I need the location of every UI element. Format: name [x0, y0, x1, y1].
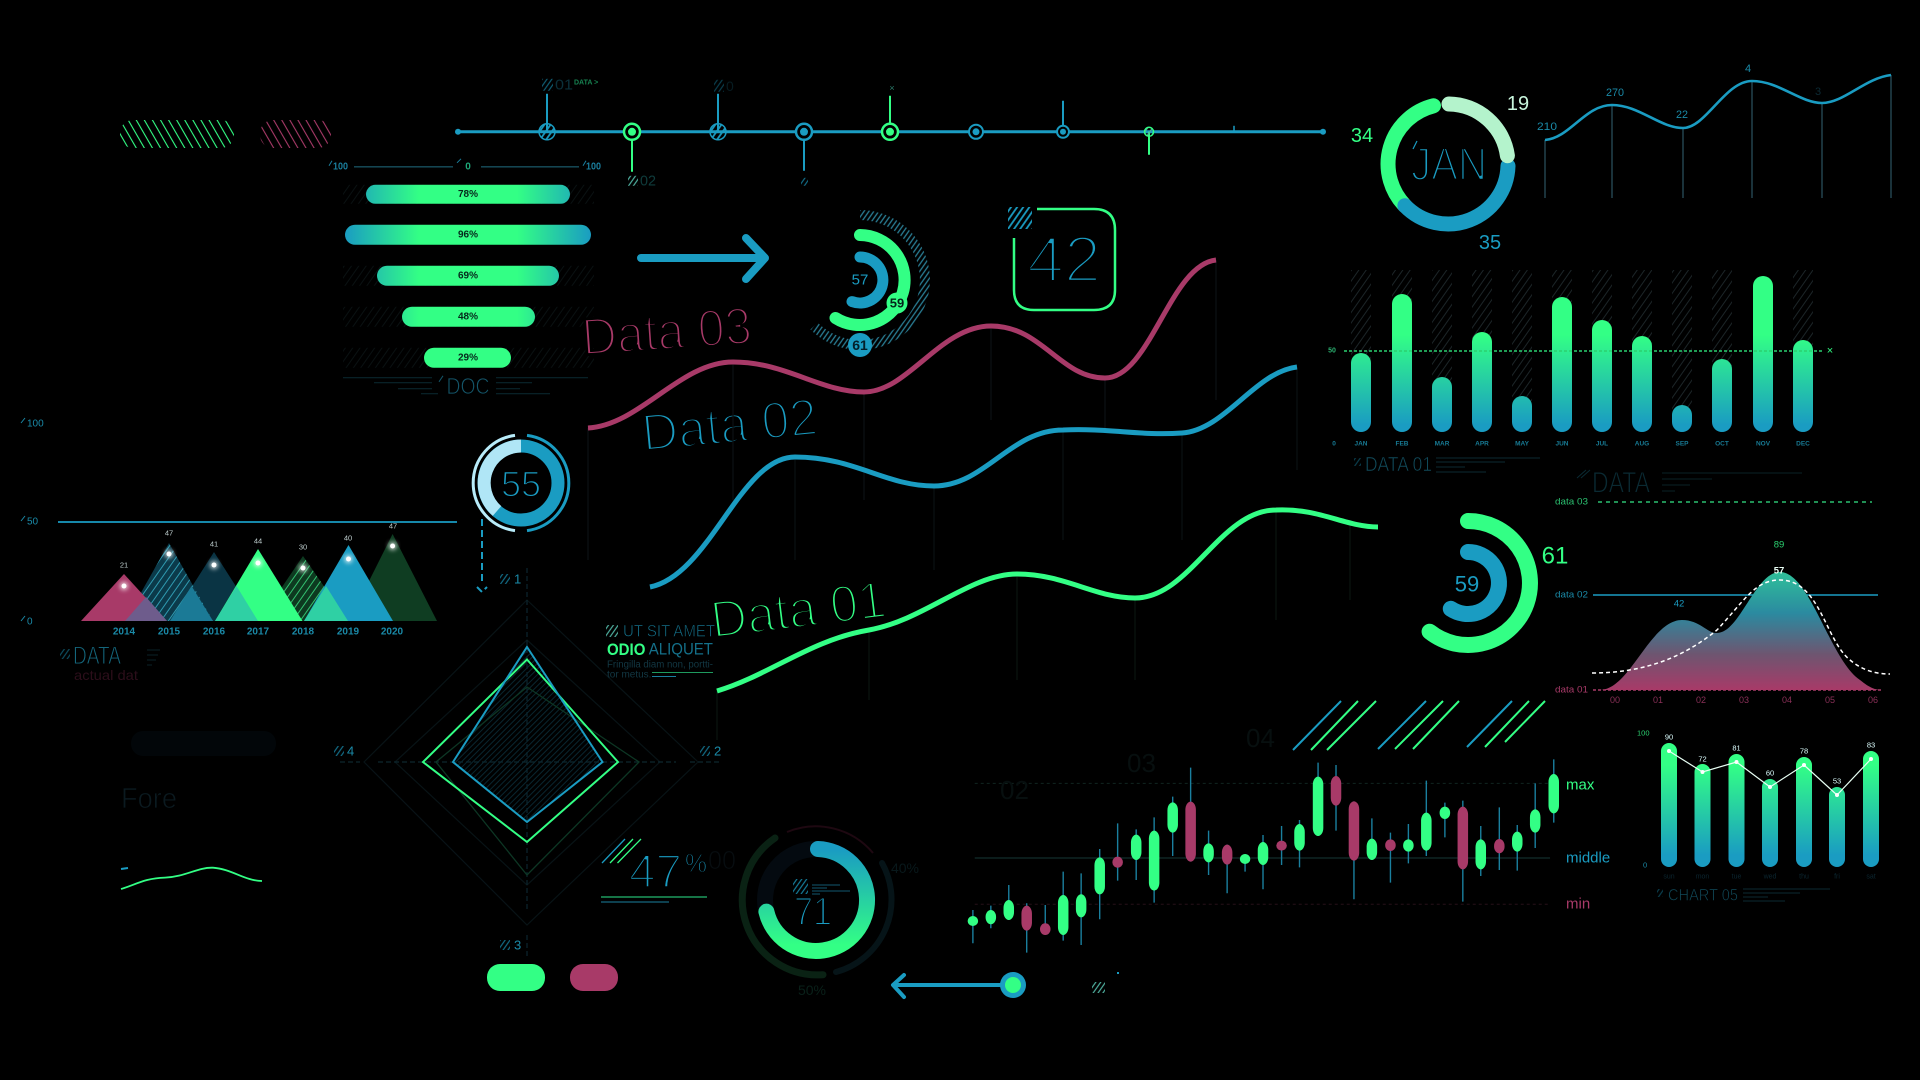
- funnel backdrop hatch: [343, 185, 594, 368]
- faded pill and Fore label: Fore: [121, 783, 177, 815]
- bar 96%: [345, 225, 591, 245]
- funnel axis: 100: [586, 161, 601, 172]
- x axis labels: [1610, 695, 1878, 705]
- DOC label: [343, 373, 588, 399]
- donut 59 and 61: 59: [1455, 572, 1479, 596]
- x axis labels: 00: [1610, 695, 1620, 705]
- x axis labels: 02: [1696, 695, 1706, 705]
- month labels: DEC: [1796, 440, 1810, 448]
- bar 78%: 78%: [458, 189, 478, 200]
- timeline labels: [542, 76, 895, 189]
- month labels: 0: [1332, 440, 1336, 448]
- value 61: 61: [1542, 542, 1568, 570]
- radar chart: [334, 568, 722, 957]
- data lines: data 02: [1555, 590, 1588, 600]
- chart 05 bars: [1637, 728, 1879, 904]
- timeline node 6: [969, 125, 983, 139]
- top right line chart: [1537, 63, 1891, 198]
- triangle chart: [21, 418, 457, 683]
- bar values: 83: [1867, 740, 1875, 750]
- donut 71: [742, 826, 919, 998]
- dim day labels: tue: [1732, 874, 1741, 880]
- triangles: [81, 534, 437, 621]
- year labels: 2016: [203, 626, 226, 638]
- green pill button: [487, 964, 545, 991]
- timeline labels: ×: [889, 83, 895, 93]
- bar values: 60: [1766, 768, 1774, 778]
- radar labels: 2: [714, 744, 721, 758]
- donut 59 and 61: [1430, 521, 1568, 645]
- timeline node 3: [710, 124, 726, 140]
- timeline node 2: [624, 124, 640, 140]
- dim day labels: sat: [1866, 874, 1876, 880]
- funnel axis: [329, 159, 601, 172]
- point values: 21: [120, 560, 128, 570]
- bar 69%: [377, 266, 559, 286]
- label Data 02: Data 02: [639, 388, 820, 463]
- timeline node 5: [882, 124, 898, 140]
- CHART 05 caption: CHART 05: [1668, 886, 1738, 904]
- month labels: NOV: [1756, 440, 1771, 448]
- number box 42: 42: [1027, 222, 1101, 296]
- dashed curve: [1592, 580, 1890, 674]
- radar hatch: [453, 647, 602, 822]
- area chart: [1555, 496, 1890, 705]
- DOC label: DOC: [446, 373, 490, 399]
- percent 47: 47: [629, 844, 682, 898]
- green series: [423, 660, 618, 842]
- green candles: [968, 774, 1559, 935]
- blue series: [453, 647, 602, 822]
- threshold line: [1344, 350, 1822, 352]
- text block UT SIT AMET: tor metus.: [607, 670, 651, 680]
- area values: 57: [1774, 566, 1784, 576]
- value 35: 35: [1479, 232, 1501, 254]
- area shape: [1600, 572, 1883, 690]
- area values: 89: [1774, 540, 1784, 550]
- data lines: data 01: [1555, 684, 1588, 696]
- faded DATA caption: [1577, 466, 1802, 500]
- white trend line: [1667, 749, 1873, 797]
- chart values: [1537, 63, 1821, 133]
- donut 71: 40%: [891, 860, 919, 876]
- chart values: 270: [1606, 87, 1624, 99]
- radar labels: 3: [514, 938, 521, 952]
- line Data 02: [650, 367, 1297, 587]
- DATA caption: [60, 642, 160, 683]
- month labels: SEP: [1675, 440, 1689, 448]
- axis labels: 100: [27, 418, 44, 430]
- radial gauge 57 59 61: 57: [852, 272, 868, 288]
- hatched pink pill: [260, 120, 331, 148]
- year labels: [113, 626, 404, 638]
- pink candles: [1021, 776, 1505, 935]
- chart values: 3: [1815, 86, 1821, 98]
- month labels: MAR: [1435, 440, 1450, 448]
- axis labels: 0: [27, 616, 33, 628]
- timeline labels: 02: [640, 172, 656, 189]
- candlestick chart: [968, 759, 1559, 953]
- month labels: MAY: [1515, 440, 1530, 448]
- number box 42: [1008, 207, 1115, 310]
- data lines: data 03: [1555, 496, 1588, 508]
- value 34: 34: [1351, 125, 1373, 147]
- text block UT SIT AMET: [606, 622, 715, 680]
- badge 59: [886, 292, 908, 314]
- timeline node 8: [1144, 127, 1154, 136]
- bar 48%: [402, 307, 535, 327]
- area values: 42: [1674, 598, 1684, 610]
- monthly bar chart: ×: [1827, 345, 1833, 357]
- bar 96%: 96%: [458, 229, 478, 240]
- candlestick labels: 04: [1246, 723, 1275, 753]
- candlestick labels: middle: [1566, 850, 1610, 866]
- dim day labels: fri: [1834, 874, 1840, 880]
- line Data 01: [717, 510, 1378, 740]
- glow points: [120, 542, 397, 590]
- x axis labels: 06: [1868, 695, 1878, 705]
- x axis labels: 01: [1653, 695, 1663, 705]
- month labels: JUN: [1555, 440, 1569, 448]
- point values: 47: [165, 528, 173, 538]
- dim day labels: wed: [1763, 874, 1777, 880]
- left arrow slider: [893, 972, 1026, 998]
- gauge 55: [473, 435, 569, 531]
- hatch backdrops: [1351, 270, 1813, 410]
- monthly bar chart: 50: [1328, 348, 1336, 354]
- month labels: [1332, 440, 1810, 448]
- point values: 40: [344, 534, 352, 542]
- value 19: 19: [1507, 93, 1529, 115]
- bar values: 90: [1665, 732, 1673, 742]
- wicks: [973, 759, 1554, 953]
- percent 47: 00: [708, 845, 736, 875]
- dim day labels: [1663, 874, 1876, 880]
- timeline labels: 01: [555, 76, 573, 93]
- chart values: 210: [1537, 121, 1557, 133]
- chart values: 4: [1745, 63, 1751, 75]
- donut 71: 71: [794, 890, 832, 934]
- text block UT SIT AMET: Fringilla diam non, portti-: [607, 660, 713, 670]
- badge 59: 59: [890, 296, 904, 310]
- radar grid: [340, 568, 722, 957]
- dim series: [436, 687, 639, 875]
- right arrow: [641, 238, 765, 279]
- year labels: 2017: [247, 626, 270, 638]
- candlestick labels: max: [1566, 776, 1595, 794]
- dashed down arrow: [477, 519, 487, 592]
- timeline node 4: [796, 124, 812, 140]
- year labels: 2015: [158, 626, 181, 638]
- point values: [120, 522, 397, 570]
- timeline: [455, 76, 1326, 189]
- month labels: AUG: [1635, 440, 1649, 448]
- small hatch icon: [1092, 972, 1119, 993]
- hatched green pill: [120, 120, 234, 148]
- bar values: 81: [1732, 744, 1741, 752]
- axis labels: [21, 418, 44, 628]
- badge 61: 61: [852, 337, 868, 353]
- CHART 05 caption: [1657, 886, 1830, 904]
- donut 71: 50%: [798, 982, 826, 998]
- text block UT SIT AMET: ODIO ALIQUET: [607, 640, 713, 658]
- dim day labels: sun: [1663, 874, 1675, 880]
- percent 47: [601, 839, 736, 902]
- candlestick labels: min: [1566, 896, 1590, 912]
- bars: [1351, 276, 1813, 432]
- x axis labels: 05: [1825, 695, 1835, 705]
- chart 05 bars: 0: [1643, 860, 1647, 870]
- DATA 01 caption: [1354, 454, 1540, 476]
- gauge 55: 55: [501, 464, 541, 504]
- dim day labels: thu: [1799, 874, 1809, 880]
- timeline labels: DATA >: [574, 79, 598, 86]
- candlestick labels: [1000, 723, 1610, 912]
- month labels: APR: [1475, 440, 1489, 448]
- candlestick labels: 02: [1000, 775, 1029, 805]
- data lines: [1555, 496, 1878, 696]
- JAN donut: JAN: [1411, 138, 1487, 190]
- bar 29%: [424, 348, 511, 368]
- radar labels: [334, 572, 721, 952]
- bar values: 53: [1833, 776, 1841, 786]
- point values: 41: [210, 540, 218, 548]
- point values: 30: [299, 542, 307, 552]
- bar 29%: 29%: [458, 352, 478, 363]
- axis labels: 50: [27, 516, 39, 528]
- point values: 47: [389, 522, 397, 530]
- timeline labels: 0: [726, 78, 734, 94]
- chart values: 22: [1676, 109, 1688, 121]
- bar 78%: [366, 185, 570, 204]
- year labels: 2020: [381, 626, 404, 638]
- x axis labels: 03: [1739, 695, 1749, 705]
- chart 05 bars: 100: [1637, 728, 1650, 738]
- candlestick labels: 03: [1127, 748, 1156, 778]
- bar values: 78: [1800, 746, 1808, 756]
- line Data 03: [588, 260, 1216, 560]
- bar values: 72: [1698, 754, 1707, 764]
- bar 69%: 69%: [458, 270, 478, 281]
- radar labels: 4: [347, 744, 354, 758]
- month labels: JAN: [1354, 440, 1368, 448]
- funnel axis: 100: [333, 161, 348, 172]
- year labels: 2019: [337, 626, 360, 638]
- faded DATA caption: DATA: [1592, 466, 1650, 500]
- month labels: OCT: [1715, 440, 1729, 448]
- JAN donut: [1351, 93, 1529, 254]
- DATA caption: DATA: [73, 642, 121, 670]
- month labels: JUL: [1596, 440, 1608, 448]
- label Data 03: Data 03: [580, 297, 754, 367]
- area values: [1674, 540, 1784, 610]
- guide lines: [975, 783, 1550, 904]
- percent 47: %: [685, 848, 707, 878]
- radar labels: 1: [514, 572, 521, 586]
- funnel bar chart: [329, 159, 601, 399]
- DATA 01 caption: DATA 01: [1365, 454, 1432, 476]
- triple slash marks: [1293, 701, 1545, 750]
- bar values: [1665, 732, 1875, 786]
- dim day labels: mon: [1696, 874, 1709, 880]
- text block UT SIT AMET: UT SIT AMET: [623, 622, 715, 640]
- badge 61: [848, 333, 872, 357]
- pink pill button: [570, 964, 618, 991]
- month labels: FEB: [1396, 440, 1409, 448]
- radial gauge 57 59 61: [814, 215, 925, 357]
- timeline node 7: [1057, 126, 1069, 138]
- faded pill and Fore label: [121, 731, 276, 889]
- bar 48%: 48%: [458, 311, 478, 322]
- DATA caption: actual dat: [74, 667, 138, 683]
- bars: [1661, 743, 1879, 867]
- timeline node 1: [539, 124, 555, 140]
- funnel axis: 0: [465, 161, 471, 172]
- year labels: 2018: [292, 626, 315, 638]
- year labels: 2014: [113, 626, 136, 638]
- label Data 01: Data 01: [707, 571, 889, 650]
- monthly bar chart: [1328, 270, 1833, 476]
- point values: 44: [254, 536, 262, 546]
- x axis labels: 04: [1782, 695, 1792, 705]
